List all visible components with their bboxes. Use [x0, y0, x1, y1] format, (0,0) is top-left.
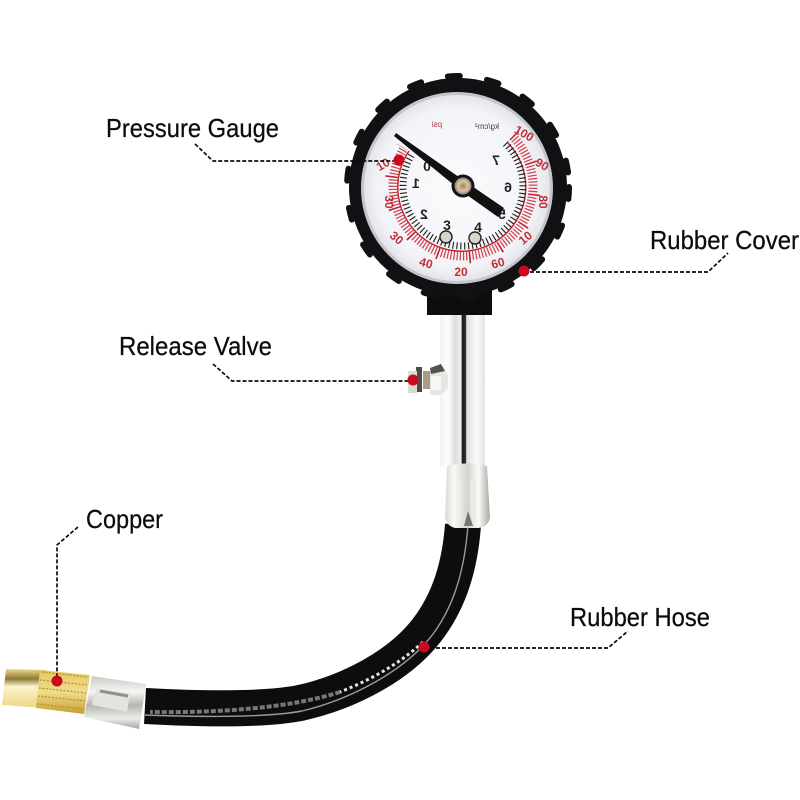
label: Rubber Cover — [518, 225, 799, 276]
red scale numbers: 10 — [516, 228, 535, 248]
red scale numbers: 10 — [374, 155, 393, 174]
release valve — [408, 364, 448, 395]
crimped metal collar — [445, 464, 490, 528]
needle and pivot — [394, 133, 504, 217]
red scale numbers: 30 — [387, 228, 406, 248]
black scale numbers: 4 — [474, 219, 482, 235]
chrome hose ferrule — [84, 676, 146, 729]
black scale numbers: 1 — [412, 175, 420, 191]
label: Release Valve — [119, 331, 418, 386]
unit labels: psi — [432, 120, 442, 129]
black scale numbers — [412, 152, 512, 235]
dial screws — [440, 231, 481, 244]
unit labels — [432, 120, 499, 131]
black scale numbers: 5 — [498, 206, 506, 222]
unit labels: kg/cm² — [475, 122, 499, 131]
red scale numbers: 100 — [512, 122, 536, 145]
label: Copper: Copper — [86, 504, 163, 534]
red scale numbers: 20 — [454, 265, 468, 279]
black scale numbers: 6 — [504, 179, 512, 195]
label: Pressure Gauge — [106, 113, 404, 166]
label: Rubber Hose — [418, 602, 710, 652]
rubber hose — [145, 525, 468, 716]
black scale numbers: 2 — [420, 206, 428, 222]
red scale numbers: 90 — [533, 155, 552, 174]
label: Rubber Hose: Rubber Hose — [570, 602, 710, 632]
red scale numbers: 30 — [382, 195, 396, 209]
red pressure scale — [391, 135, 535, 258]
red scale numbers — [374, 122, 552, 279]
label: Release Valve: Release Valve — [119, 331, 272, 361]
chrome stem tube — [440, 312, 485, 466]
red scale numbers: 80 — [536, 195, 550, 209]
black scale numbers: 3 — [443, 217, 451, 233]
black kg scale — [403, 144, 523, 246]
brass copper fitting — [2, 669, 90, 714]
red scale numbers: 60 — [490, 255, 507, 272]
dial face — [361, 92, 553, 284]
red scale numbers: 40 — [418, 255, 435, 272]
gauge — [347, 76, 569, 315]
label: Pressure Gauge: Pressure Gauge — [106, 113, 279, 143]
black scale numbers: 0 — [423, 158, 431, 174]
black scale numbers: 7 — [492, 152, 500, 168]
rubber cover — [347, 76, 569, 315]
label: Copper — [52, 504, 163, 686]
